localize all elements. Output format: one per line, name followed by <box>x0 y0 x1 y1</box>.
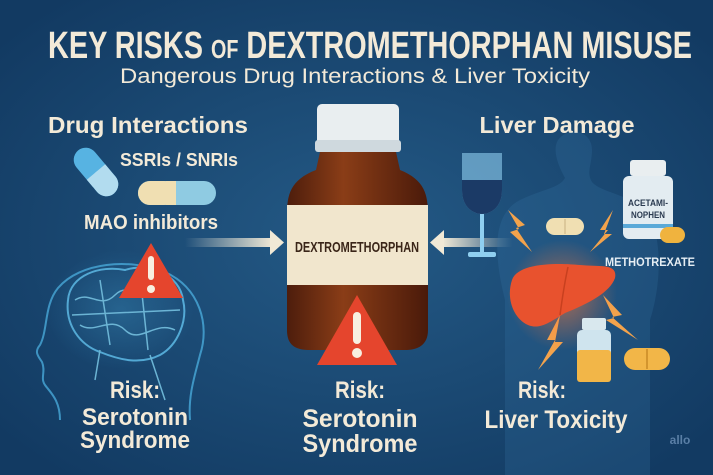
bottle <box>287 104 428 350</box>
icon: blue capsule <box>69 143 123 201</box>
subtitle: Dangerous Drug Interactions & Liver Toxicity <box>120 65 591 88</box>
bottle: DEXTROMETHORPHAN <box>295 239 419 256</box>
label: methotrexate: METHOTREXATE <box>605 255 695 269</box>
risk text center: Syndrome <box>302 430 418 458</box>
risk text left: Risk: <box>110 377 160 404</box>
arrow right <box>430 230 512 255</box>
icon: acetaminophen bottle: NOPHEN <box>631 210 665 220</box>
risk text center: Risk: <box>335 377 385 404</box>
brain head <box>37 250 204 420</box>
heading: liver damage: Liver Damage <box>480 112 634 138</box>
body silhouette <box>497 132 659 475</box>
label: SSRIs: SSRIs / SNRIs <box>120 150 238 170</box>
risk text right: Liver Toxicity <box>484 406 628 434</box>
icon: acetaminophen bottle <box>623 160 685 243</box>
warning triangle center <box>317 295 397 365</box>
icon: liver <box>507 240 617 350</box>
icon: cream capsule <box>138 181 216 205</box>
label <box>287 205 428 285</box>
heading: drug interactions: Drug Interactions <box>48 112 248 138</box>
icon: acetaminophen bottle: ACETAMI- <box>628 198 668 208</box>
icon: wine glass <box>462 153 502 257</box>
risk text center: Serotonin <box>302 405 418 433</box>
warning triangle left <box>119 243 183 298</box>
lightning bolts <box>508 210 638 370</box>
arrow left <box>185 230 284 255</box>
risk text center <box>302 377 418 458</box>
cap <box>317 104 399 152</box>
risk text right: Risk: <box>518 377 566 404</box>
logo: allo <box>670 433 690 447</box>
label: MAO inhibitors: MAO inhibitors <box>84 212 218 234</box>
icon: yellow pill <box>624 348 670 370</box>
risk text left: Serotonin <box>82 404 188 431</box>
risk text right <box>484 377 628 434</box>
risk text left: Syndrome <box>80 427 190 454</box>
icon: pill center <box>546 218 584 235</box>
risk text left <box>80 377 190 454</box>
icon: small bottle <box>577 318 611 382</box>
